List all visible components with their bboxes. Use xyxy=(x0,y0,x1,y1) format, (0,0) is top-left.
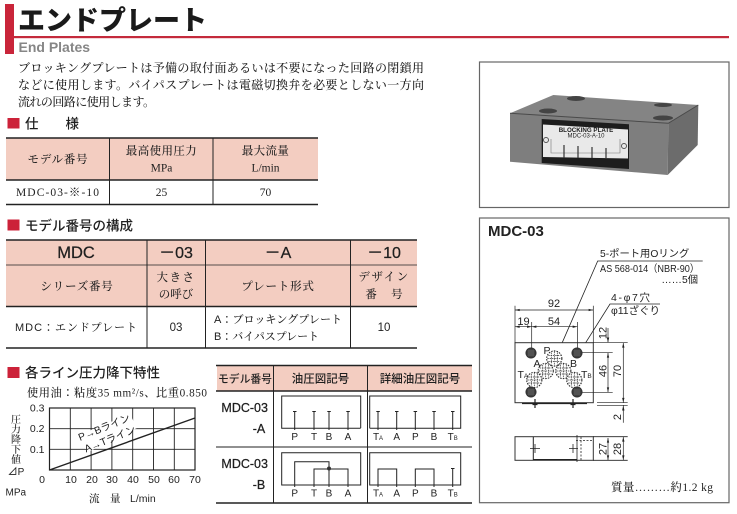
x axis ticks: 60 xyxy=(168,474,180,486)
side dimensions: 27 xyxy=(598,443,610,455)
table: specifications: 最高使用圧力 xyxy=(126,144,197,158)
table: specifications: 最大流量 xyxy=(242,144,289,158)
symbol: MDC-03-B: P xyxy=(291,488,298,500)
detailed symbol: MDC-03-A: P xyxy=(412,432,419,443)
drawing: side view xyxy=(515,435,628,462)
symbol: MDC-03-B: T xyxy=(311,488,317,500)
intro text block: ブロッキングプレートは予備の取付面あるいは不要になった回路の閉鎖用 xyxy=(18,60,424,75)
detailed symbol: MDC-03-A: A xyxy=(393,432,400,443)
x axis ticks: 30 xyxy=(106,474,118,486)
table: specifications: L/min xyxy=(251,162,280,174)
oil note: 使用油：粘度35 mm²/s、比重0.850 xyxy=(27,386,207,400)
table: model number: シリーズ番号 xyxy=(40,279,114,293)
chart line xyxy=(50,418,195,470)
y axis ticks xyxy=(30,402,45,456)
table: model number: プレート形式 xyxy=(241,279,315,293)
callout: O-ring: ……5個 xyxy=(661,273,698,286)
table: model number: A：ブロッキングプレート xyxy=(214,313,342,326)
y axis title: 値 xyxy=(11,453,21,466)
detailed symbol: MDC-03-B: TA xyxy=(373,488,383,500)
callout: bolt holes xyxy=(580,292,660,352)
detailed symbol: MDC-03-B xyxy=(370,453,461,500)
dimension lines: 46 xyxy=(598,365,610,377)
drawing: top view xyxy=(515,298,628,423)
dimension lines: 54 xyxy=(548,316,560,328)
title: エンドプレート xyxy=(18,6,207,36)
side dimensions: 28 xyxy=(612,443,624,455)
table: specifications: MDC-03-※-10 xyxy=(16,187,99,199)
callout: bolt holes: φ11ざぐり xyxy=(611,304,660,317)
table: circuit symbols: -B xyxy=(253,478,265,492)
table: model number: 番 号 xyxy=(365,287,403,301)
y axis title: 力 xyxy=(11,423,21,436)
port labels: TA xyxy=(518,369,529,381)
dimension lines xyxy=(515,298,624,423)
table: circuit symbols: 詳細油圧図記号 xyxy=(380,372,460,386)
heading: model number: モデル番号の構成 xyxy=(25,218,133,234)
detailed symbol: MDC-03-B: P xyxy=(412,488,419,500)
callout: O-ring xyxy=(558,247,703,352)
panel: dimension drawing: MDC-03 xyxy=(488,223,544,240)
panel: product photo xyxy=(480,62,729,208)
detailed symbol: MDC-03-A: TA xyxy=(373,432,383,443)
x axis ticks: 70 xyxy=(189,474,201,486)
table: circuit symbols: モデル番号 xyxy=(218,372,272,386)
callout: O-ring: 5-ポート用Oリング xyxy=(600,247,689,260)
port labels: A xyxy=(534,358,541,370)
ports xyxy=(526,348,582,398)
table: specifications: 70 xyxy=(260,187,272,199)
chart line labels: A→Tライン xyxy=(83,424,138,455)
table: model number: MDC：エンドプレート xyxy=(15,321,137,334)
table: specifications: モデル番号 xyxy=(28,152,88,166)
x axis ticks xyxy=(39,474,201,486)
table: model number: B：バイパスプレート xyxy=(214,330,319,343)
x axis ticks: 50 xyxy=(148,474,160,486)
port labels: TB xyxy=(581,369,592,381)
intro text block: 流れの回路に使用します。 xyxy=(18,94,155,109)
table: model number: 10 xyxy=(378,322,390,334)
table: model number: MDC xyxy=(57,244,95,262)
heading: specifications: 様 xyxy=(66,116,80,132)
table: circuit symbols xyxy=(216,366,472,503)
table: circuit symbols: MDC-03 xyxy=(221,457,268,471)
symbol: MDC-03-A: P xyxy=(291,432,298,443)
heading: specifications xyxy=(8,116,80,132)
photo: blocking plate: BLOCKING PLATE xyxy=(559,127,613,134)
title: End Plates xyxy=(18,39,90,55)
y axis ticks: 0.1 xyxy=(30,444,45,456)
table: circuit symbols: MDC-03 xyxy=(221,401,268,415)
table: specifications: 25 xyxy=(156,187,168,199)
dimension lines: 70 xyxy=(612,365,624,377)
table: circuit symbols: 油圧図記号 xyxy=(292,372,349,386)
heading: pressure drop: 各ライン圧力降下特性 xyxy=(25,364,160,380)
table: circuit symbols: -A xyxy=(253,422,266,436)
table: model number: －10 xyxy=(367,245,401,262)
x axis ticks: 20 xyxy=(86,474,98,486)
symbol: MDC-03-A: B xyxy=(326,432,333,443)
x axis title: L/min xyxy=(130,493,156,505)
detailed symbol: MDC-03-B: TB xyxy=(448,488,458,500)
panel: dimension drawing xyxy=(480,218,729,503)
symbol: MDC-03-A: T xyxy=(311,432,317,443)
symbol: MDC-03-A: A xyxy=(345,432,352,443)
chart: pressure drop: MPa xyxy=(6,488,26,498)
table: model number: 大きさ xyxy=(156,270,196,284)
table: specifications xyxy=(6,138,318,204)
y axis title xyxy=(8,414,25,478)
symbol: MDC-03-B: A xyxy=(345,488,352,500)
detailed symbol: MDC-03-B: B xyxy=(431,488,438,500)
dimension lines: 2 xyxy=(612,414,624,420)
y axis title: ⊿P xyxy=(8,466,25,478)
chart: pressure drop xyxy=(6,402,201,505)
heading: specifications: 仕 xyxy=(25,116,39,132)
dimension lines: 12 xyxy=(598,327,610,339)
port labels xyxy=(518,345,592,381)
table: specifications: MPa xyxy=(151,162,172,174)
title xyxy=(5,4,729,55)
detailed symbol: MDC-03-A: B xyxy=(431,432,438,443)
y axis title: 圧 xyxy=(11,414,21,426)
intro text block: などに使用します。バイパスプレートは電磁切換弁を必要としない一方向 xyxy=(18,77,424,92)
dimension lines: 19 xyxy=(517,316,530,328)
port labels: P xyxy=(544,345,551,357)
side dimensions xyxy=(598,437,624,460)
callout: O-ring: AS 568-014（NBR-90） xyxy=(600,263,699,275)
table: model number: の呼び xyxy=(159,288,194,301)
y axis title: 下 xyxy=(11,444,21,456)
photo: blocking plate xyxy=(510,95,698,175)
table: model number: 03 xyxy=(170,322,182,334)
detailed symbol: MDC-03-A: TB xyxy=(448,432,458,443)
table: model number: －A xyxy=(265,245,292,262)
detailed symbol: MDC-03-B: A xyxy=(393,488,400,500)
photo: blocking plate: MDC-03-A-10 xyxy=(567,134,605,140)
mass note: 質量………約1.2 kg xyxy=(611,480,713,494)
x axis ticks: 10 xyxy=(65,474,77,486)
dimension lines: 92 xyxy=(548,298,560,310)
symbol: MDC-03-B: B xyxy=(326,488,333,500)
y axis ticks: 0.3 xyxy=(30,402,45,414)
port labels: B xyxy=(570,358,577,370)
x axis ticks: 0 xyxy=(39,474,45,486)
symbol: MDC-03-B xyxy=(282,453,361,500)
x axis title: 流 量 xyxy=(89,492,121,505)
y axis title: 降 xyxy=(11,433,21,446)
chart line labels: P→Bライン xyxy=(77,412,132,444)
table: model number xyxy=(6,240,417,348)
table: model number: －03 xyxy=(159,245,193,262)
intro text block xyxy=(18,60,424,109)
detailed symbol: MDC-03-A xyxy=(370,396,461,443)
x axis ticks: 40 xyxy=(127,474,139,486)
y axis ticks: 0.2 xyxy=(30,423,45,435)
callout: bolt holes: 4-φ7穴 xyxy=(611,292,650,304)
table: model number: デザイン xyxy=(358,270,410,284)
x axis title xyxy=(89,492,156,505)
symbol: MDC-03-A xyxy=(282,396,361,443)
chart line labels xyxy=(77,412,138,455)
